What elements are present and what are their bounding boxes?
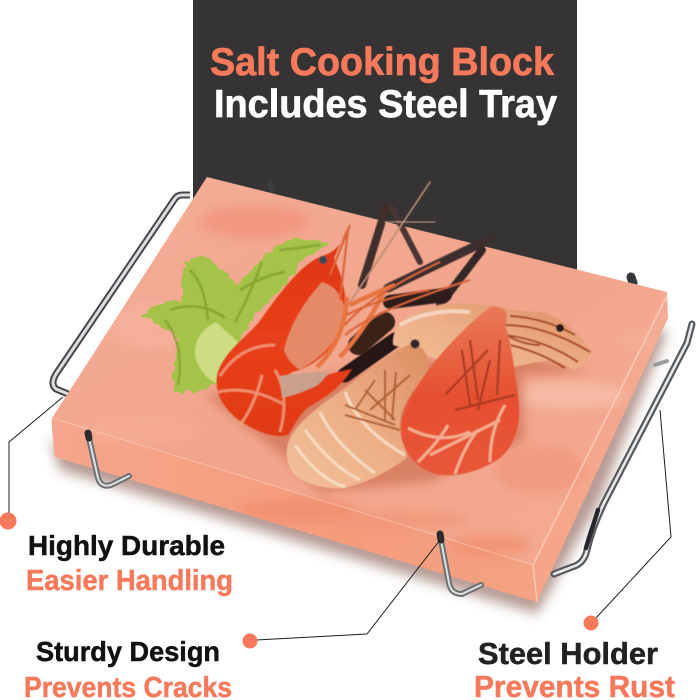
title: Salt Cooking Block xyxy=(210,41,554,84)
callout: steel holder xyxy=(474,410,675,700)
block right front face xyxy=(533,292,668,602)
callout: sturdy design: Sturdy Design xyxy=(36,636,220,667)
dark title panel xyxy=(193,0,577,272)
lettuce xyxy=(142,238,332,392)
callout: highly durable: Highly Durable xyxy=(28,530,225,561)
callout: sturdy design xyxy=(24,540,440,700)
steel handle right xyxy=(554,324,692,574)
callout: steel holder: Steel Holder xyxy=(478,636,658,671)
food shadow xyxy=(205,350,590,492)
shrimp: pale rear, right xyxy=(393,303,593,370)
dark shrimp claws xyxy=(335,182,490,375)
callout: highly durable xyxy=(0,397,233,597)
callout: highly durable: Easier Handling xyxy=(26,565,233,597)
salt block xyxy=(52,177,668,602)
title xyxy=(210,41,557,126)
block top face xyxy=(52,177,667,565)
title: Includes Steel Tray xyxy=(214,83,557,126)
steel tray feet xyxy=(88,433,481,594)
block left front face xyxy=(52,418,537,602)
shrimp: red front right xyxy=(401,307,519,475)
block shadow xyxy=(50,330,668,614)
foot middle xyxy=(440,534,481,594)
steel handle left xyxy=(53,195,190,394)
shrimp: pale front xyxy=(287,340,429,488)
steel tray rear pegs xyxy=(270,184,633,283)
shrimp: large red xyxy=(217,225,470,436)
foot left xyxy=(88,433,129,486)
